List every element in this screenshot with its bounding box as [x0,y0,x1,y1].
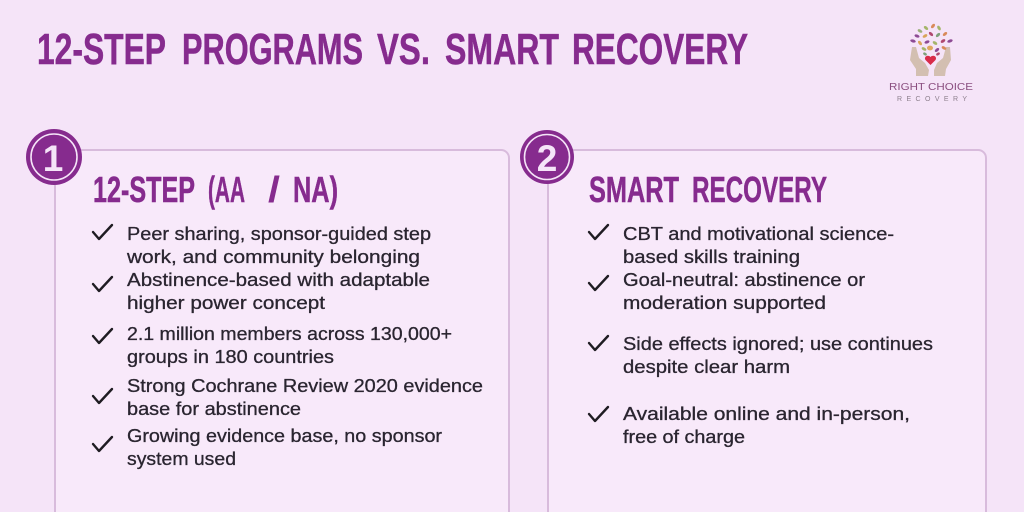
badge: number 2 [520,130,574,184]
title: SMART [445,25,559,74]
icon: check [589,225,608,239]
point 4: Available online and in-person, [623,403,910,424]
point 2 [623,269,865,313]
title [37,25,748,74]
icon: check [93,389,112,403]
icon: check [93,329,112,343]
point 2: Goal-neutral: abstinence or [623,269,865,290]
list: SMART points [589,223,933,447]
title: VS. [377,25,430,74]
point 3: groups in 180 countries [127,346,334,367]
badge: number 2: 2 [537,138,557,179]
icon: check [589,336,608,350]
heading: SMART Recovery: SMART [589,169,679,210]
heading: 12-step [93,169,338,210]
heading: 12-step: (AA [208,169,245,210]
point 1 [126,223,431,267]
point 5 [127,425,442,469]
point 3 [623,333,933,377]
icon: hands and leaf tree [910,23,953,76]
logo subtext: RECOVERY [897,96,967,103]
point 2: moderation supported [623,292,826,313]
point 1: work, and community belonging [126,246,420,267]
point 1 [623,223,894,267]
point 4: base for abstinence [127,398,301,419]
point 3: 2.1 million members across 130,000+ [127,323,452,344]
heading: 12-step: / [268,169,280,210]
point 4 [127,375,483,419]
badge: number 1: 1 [43,138,63,179]
point 3: Side effects ignored; use continues [623,333,933,354]
heading: 12-step: NA) [293,169,338,210]
badge: number 1 [26,129,82,185]
title: RECOVERY [572,25,748,74]
list: 12-step points [93,223,483,469]
logo: Right Choice Recovery [889,23,973,103]
logo wordmark: RIGHT CHOICE [889,81,973,93]
icon: check [589,407,608,421]
panel: 12-step [26,129,509,512]
point 4 [623,403,910,447]
point 2: Abstinence-based with adaptable [127,269,430,290]
panel outline [548,150,986,512]
icon: check [93,225,112,239]
title: PROGRAMS [182,25,363,74]
point 2 [127,269,430,313]
heading: SMART Recovery [589,169,827,210]
point 2: higher power concept [127,292,325,313]
panel outline [55,150,509,512]
icon: check [93,277,112,291]
panel: SMART Recovery [520,130,986,512]
point 1: CBT and motivational science- [623,223,894,244]
point 3: despite clear harm [623,356,790,377]
title: 12-STEP [37,25,166,74]
icon: check [589,276,608,290]
point 4: Strong Cochrane Review 2020 evidence [127,375,483,396]
point 1: Peer sharing, sponsor-guided step [127,223,431,244]
point 3 [127,323,452,367]
heading: SMART Recovery: RECOVERY [692,169,827,210]
heading: 12-step: 12-STEP [93,169,195,210]
point 5: Growing evidence base, no sponsor [127,425,442,446]
point 4: free of charge [623,426,745,447]
point 5: system used [127,448,236,469]
point 1: based skills training [623,246,800,267]
icon: check [93,437,112,451]
